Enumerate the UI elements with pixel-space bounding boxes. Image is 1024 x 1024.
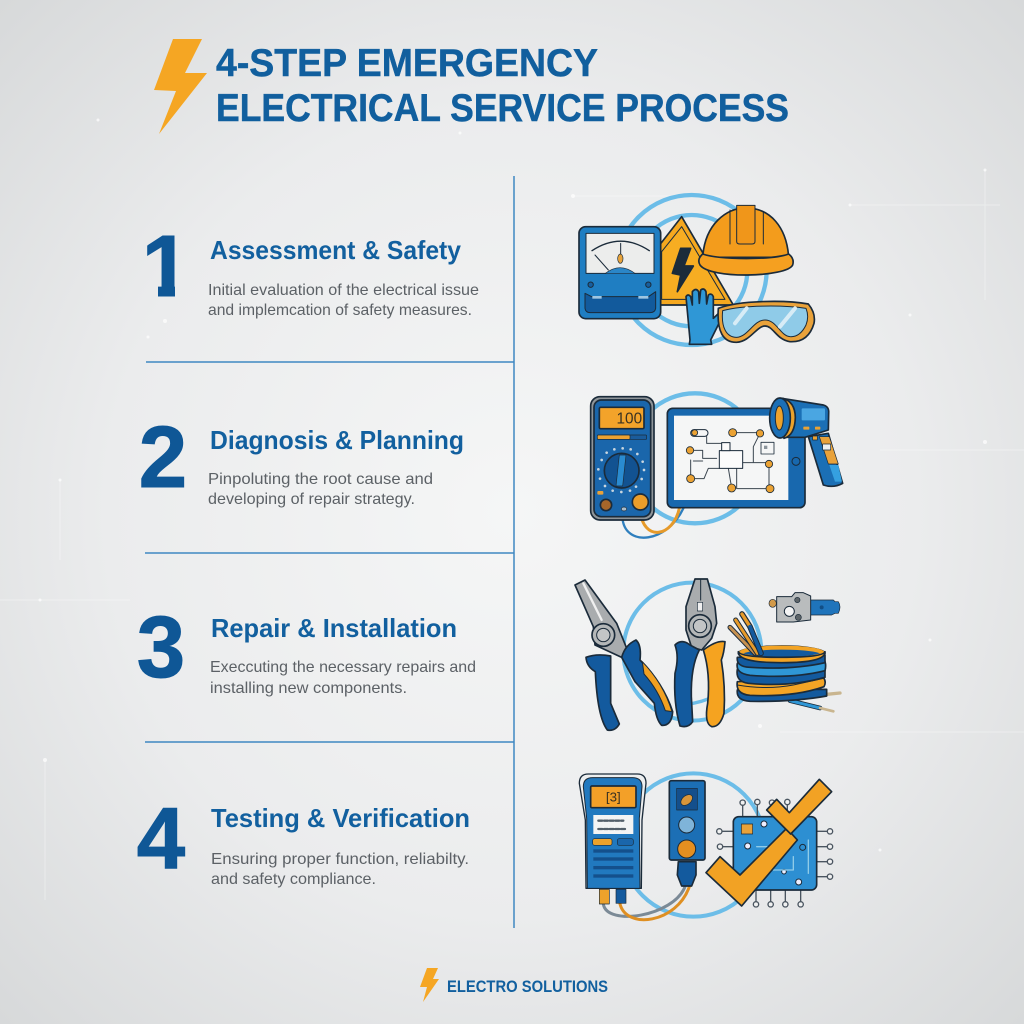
icon: hard hat — [699, 205, 793, 275]
step number 4: 4 — [137, 790, 185, 887]
panel: step 3 text — [137, 599, 476, 697]
icon: circuit board — [717, 799, 833, 907]
icon group: safety equipment — [579, 195, 814, 345]
icon: footer bolt — [420, 968, 439, 1002]
step 2 heading: Diagnosis & Planning — [210, 425, 464, 455]
step 1 description: and implemcation of safety measures. — [208, 302, 472, 319]
icon group: diagnostic tools — [591, 393, 843, 538]
icon: wires — [623, 508, 683, 538]
footer logo — [420, 968, 608, 1002]
icon: analog meter — [579, 227, 661, 319]
icon: center pliers — [675, 579, 725, 727]
icon: thermal gun — [770, 398, 843, 486]
step 1 heading: Assessment & Safety — [210, 235, 462, 265]
icon: connector — [769, 593, 840, 622]
vertical divider — [513, 176, 515, 928]
icon: probe device — [669, 781, 705, 886]
icon: left pliers — [575, 580, 673, 730]
step 4 description: and safety compliance. — [211, 871, 376, 888]
icon: multimeter — [591, 397, 654, 520]
step 4 description — [211, 851, 469, 888]
icon: tablet with circuit diagram — [667, 408, 805, 508]
step 1 description: Initial evaluation of the electrical issue — [208, 282, 479, 299]
icon: handheld tester: [3] — [606, 790, 621, 805]
title: ELECTRICAL SERVICE PROCESS — [216, 87, 789, 130]
step 3 description — [210, 659, 476, 697]
icon: safety goggles — [718, 301, 814, 342]
icon group: testing tools — [579, 773, 833, 920]
step 3 heading: Repair & Installation — [211, 613, 457, 643]
icon: wire coil — [730, 614, 840, 711]
icon: test wires — [603, 887, 689, 920]
title: 4-STEP EMERGENCY — [216, 42, 598, 85]
step 4 heading: Testing & Verification — [211, 803, 470, 833]
icon group: repair tools — [575, 579, 840, 730]
icon: check mark — [706, 779, 832, 906]
step 4 description: Ensuring proper function, reliabilty. — [211, 851, 469, 868]
icon: warning triangle — [658, 217, 733, 305]
icon: handheld tester — [579, 774, 646, 904]
step 3 description: installing new components. — [210, 680, 407, 697]
icon: blue glove — [686, 289, 722, 344]
step 1 description — [208, 282, 479, 319]
panel: step 4 text — [137, 790, 470, 888]
step number 3: 3 — [137, 599, 185, 696]
step 2 description: Pinpoluting the root cause and — [208, 471, 433, 488]
step 3 description: Execcuting the necessary repairs and — [210, 659, 476, 676]
title — [216, 42, 789, 130]
step 2 description: developing of repair strategy. — [208, 491, 415, 508]
icon: multimeter: 100 — [617, 410, 642, 427]
step number 2: 2 — [139, 409, 187, 506]
step 2 description — [208, 471, 433, 508]
title lightning bolt icon — [154, 39, 207, 134]
panel: step 1 text — [147, 236, 478, 318]
footer brand name: ELECTRO SOLUTIONS — [447, 977, 608, 996]
panel: step 2 text — [139, 409, 464, 508]
step number 1: 1 — [142, 218, 190, 315]
